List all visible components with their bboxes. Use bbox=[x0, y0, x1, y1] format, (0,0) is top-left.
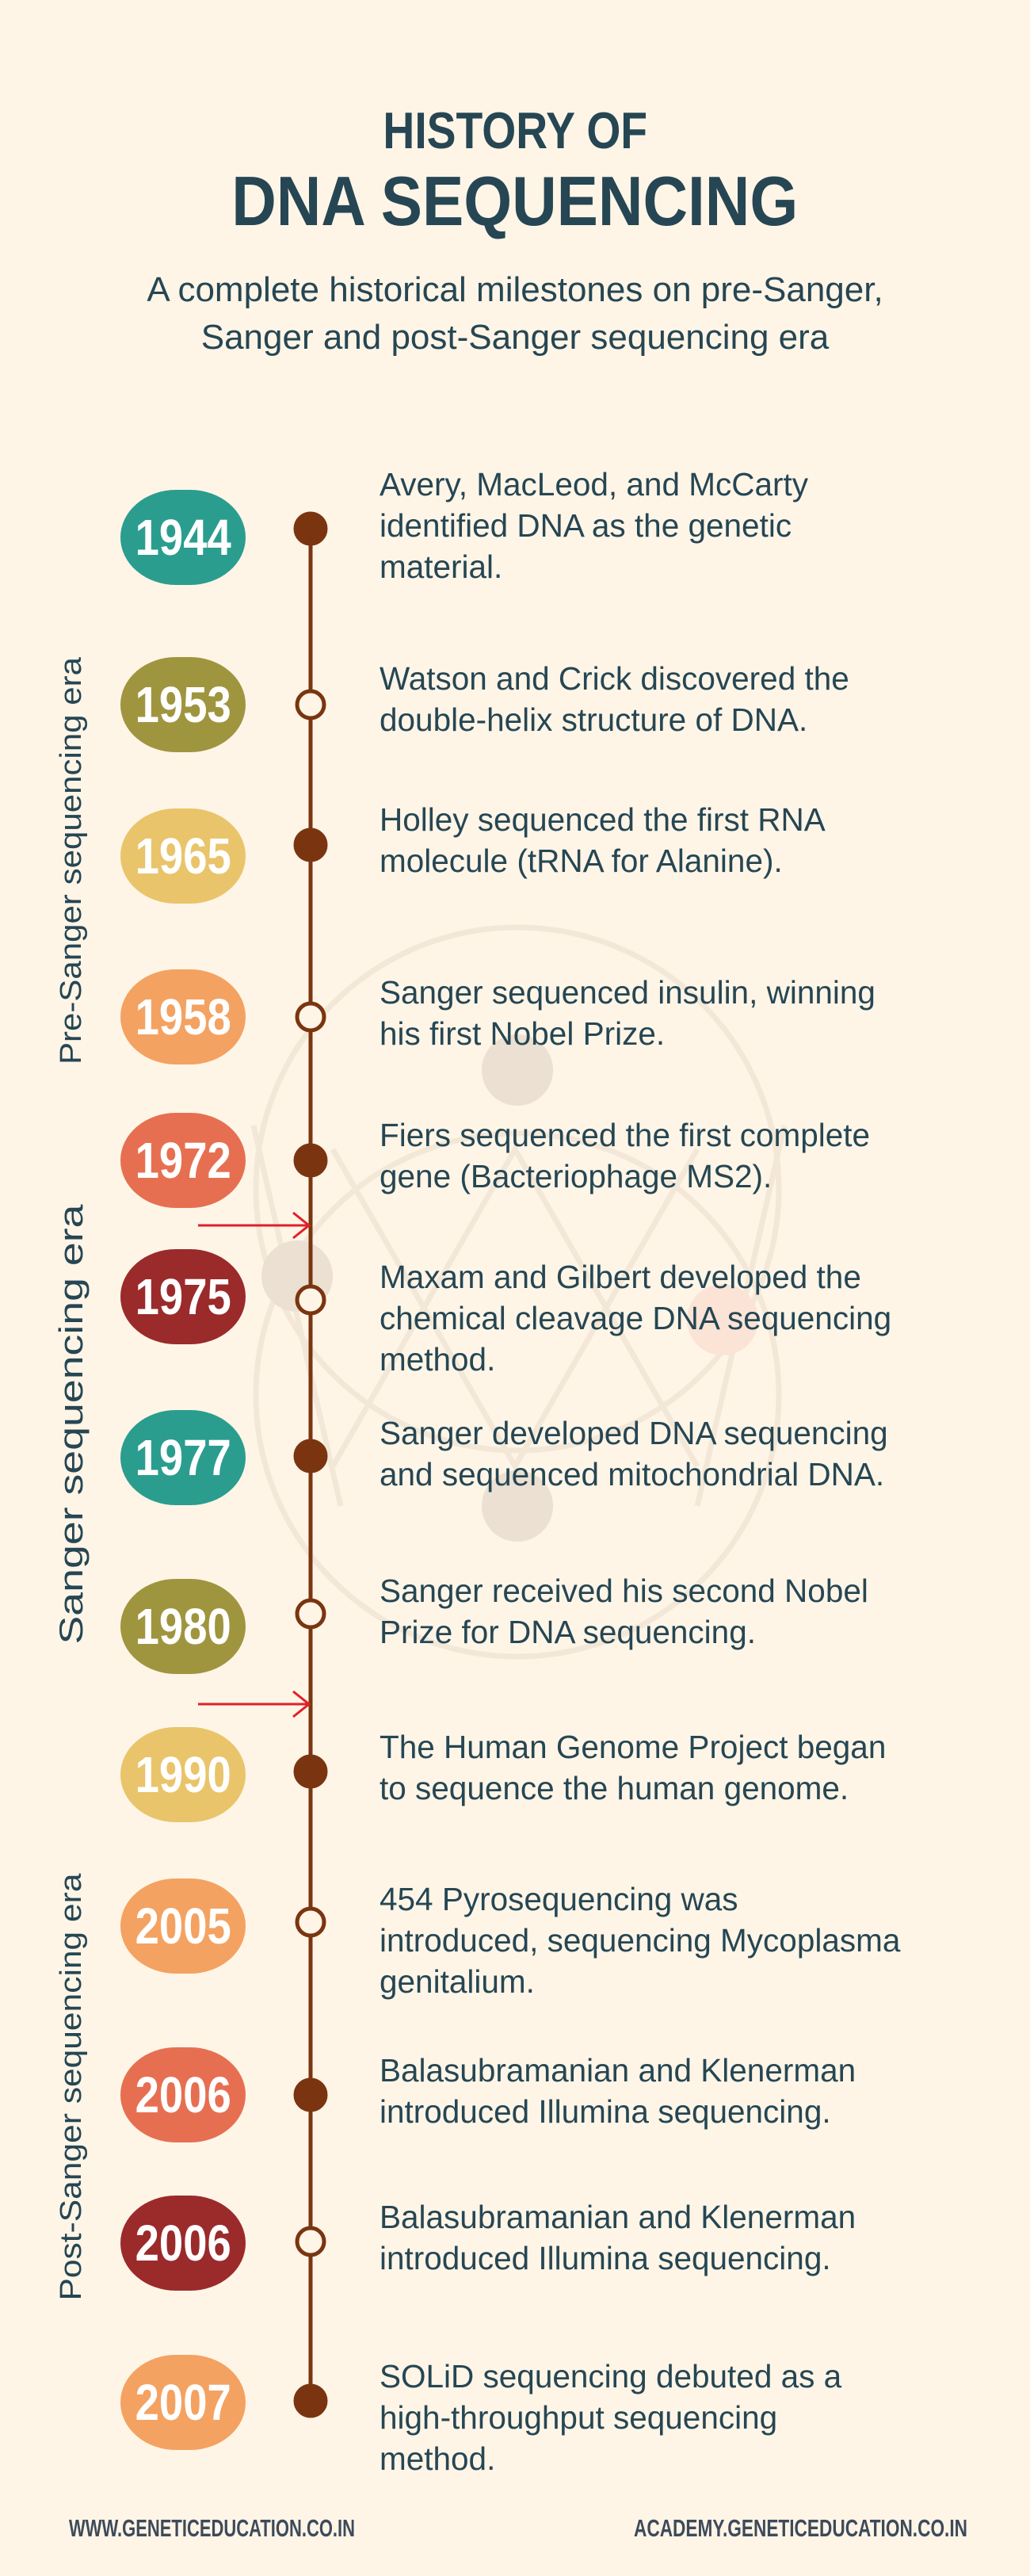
text 1975: chemical cleavage DNA sequencing bbox=[380, 1300, 891, 1336]
text 2007 bbox=[380, 2358, 841, 2477]
text 2005: 454 Pyrosequencing was bbox=[380, 1881, 738, 1917]
arrows bbox=[198, 1213, 309, 1717]
badge 1972: 1972 bbox=[135, 1132, 231, 1189]
badge 2006 b bbox=[120, 2196, 246, 2291]
text 1944 bbox=[380, 466, 808, 585]
text 2006 b bbox=[380, 2199, 856, 2276]
text 1990: The Human Genome Project began bbox=[380, 1729, 886, 1765]
text 1944: identified DNA as the genetic bbox=[380, 507, 792, 544]
text 1977: Sanger developed DNA sequencing bbox=[380, 1415, 888, 1451]
text 1977 bbox=[380, 1415, 888, 1492]
subtitle: Sanger and post-Sanger sequencing era bbox=[201, 318, 829, 357]
text 1953 bbox=[380, 660, 849, 738]
text 2005 bbox=[380, 1881, 900, 2000]
badge 1953: 1953 bbox=[135, 676, 231, 733]
text 1990: to sequence the human genome. bbox=[380, 1770, 849, 1806]
text 1980: Sanger received his second Nobel bbox=[380, 1573, 868, 1609]
text 1980 bbox=[380, 1573, 868, 1650]
text 2007: SOLiD sequencing debuted as a bbox=[380, 2358, 841, 2394]
text 2005: introduced, sequencing Mycoplasma bbox=[380, 1922, 900, 1959]
badge 1977 bbox=[120, 1410, 246, 1505]
subtitle: A complete historical milestones on pre-Sanger, bbox=[147, 270, 883, 309]
text 2006 bbox=[380, 2052, 856, 2130]
badge 2006 bbox=[120, 2047, 246, 2142]
badge 1980 bbox=[120, 1579, 246, 1674]
text 2006 b: Balasubramanian and Klenerman bbox=[380, 2199, 856, 2235]
badge 1977: 1977 bbox=[135, 1429, 231, 1486]
text 1944: Avery, MacLeod, and McCarty bbox=[380, 466, 808, 503]
badge 2006 b: 2006 bbox=[135, 2215, 231, 2272]
text 1965 bbox=[380, 801, 826, 879]
dots bbox=[296, 514, 326, 2416]
text 1965: Holley sequenced the first RNA bbox=[380, 801, 826, 838]
era labels bbox=[52, 656, 90, 2301]
text 1953: double-helix structure of DNA. bbox=[380, 701, 807, 738]
badge 1953 bbox=[120, 657, 246, 752]
text 1958 bbox=[380, 974, 876, 1052]
title: HISTORY OF: HISTORY OF bbox=[383, 101, 647, 159]
text 1958: his first Nobel Prize. bbox=[380, 1015, 665, 1052]
text 1958: Sanger sequenced insulin, winning bbox=[380, 974, 876, 1011]
text 1972: Fiers sequenced the first complete bbox=[380, 1117, 870, 1153]
badge 1975: 1975 bbox=[135, 1268, 231, 1325]
text 1965: molecule (tRNA for Alanine). bbox=[380, 843, 783, 879]
era labels: Pre-Sanger sequencing era bbox=[55, 656, 88, 1064]
footer: WWW.GENETICEDUCATION.CO.IN bbox=[69, 2514, 355, 2542]
badge 1965: 1965 bbox=[135, 827, 231, 885]
text 1975: Maxam and Gilbert developed the bbox=[380, 1259, 861, 1295]
text 1944: material. bbox=[380, 548, 502, 585]
text 2007: method. bbox=[380, 2440, 495, 2477]
badge 1965 bbox=[120, 808, 246, 904]
text 1975: method. bbox=[380, 1341, 495, 1378]
text 1977: and sequenced mitochondrial DNA. bbox=[380, 1456, 884, 1492]
era labels: Sanger sequencing era bbox=[52, 1204, 90, 1644]
text 1990 bbox=[380, 1729, 886, 1806]
footer bbox=[69, 2514, 967, 2542]
text 2005: genitalium. bbox=[380, 1963, 535, 2000]
badge 1972 bbox=[120, 1113, 246, 1208]
badge 1958: 1958 bbox=[135, 988, 231, 1045]
badge 2005: 2005 bbox=[135, 1898, 231, 1955]
text 2006: introduced Illumina sequencing. bbox=[380, 2093, 831, 2130]
badge 2005 bbox=[120, 1878, 246, 1974]
badge 1980: 1980 bbox=[135, 1598, 231, 1655]
text 2006: Balasubramanian and Klenerman bbox=[380, 2052, 856, 2089]
badge 1990 bbox=[120, 1727, 246, 1822]
badge 2007 bbox=[120, 2355, 246, 2450]
era labels: Post-Sanger sequencing era bbox=[55, 1873, 88, 2300]
badge 1958 bbox=[120, 969, 246, 1064]
subtitle bbox=[147, 270, 883, 357]
text 1972: gene (Bacteriophage MS2). bbox=[380, 1158, 772, 1194]
title: DNA SEQUENCING: DNA SEQUENCING bbox=[231, 162, 799, 240]
badge 1944: 1944 bbox=[135, 509, 231, 566]
badge 2007: 2007 bbox=[135, 2374, 231, 2431]
text 2006 b: introduced Illumina sequencing. bbox=[380, 2240, 831, 2276]
badge 1944 bbox=[120, 490, 246, 585]
text 1972 bbox=[380, 1117, 870, 1194]
badge 2006: 2006 bbox=[135, 2066, 231, 2123]
badge 1990: 1990 bbox=[135, 1746, 231, 1803]
text 1980: Prize for DNA sequencing. bbox=[380, 1614, 756, 1650]
text 1975 bbox=[380, 1259, 891, 1378]
text 1953: Watson and Crick discovered the bbox=[380, 660, 849, 697]
badge 1975 bbox=[120, 1249, 246, 1344]
text 2007: high-throughput sequencing bbox=[380, 2399, 777, 2436]
